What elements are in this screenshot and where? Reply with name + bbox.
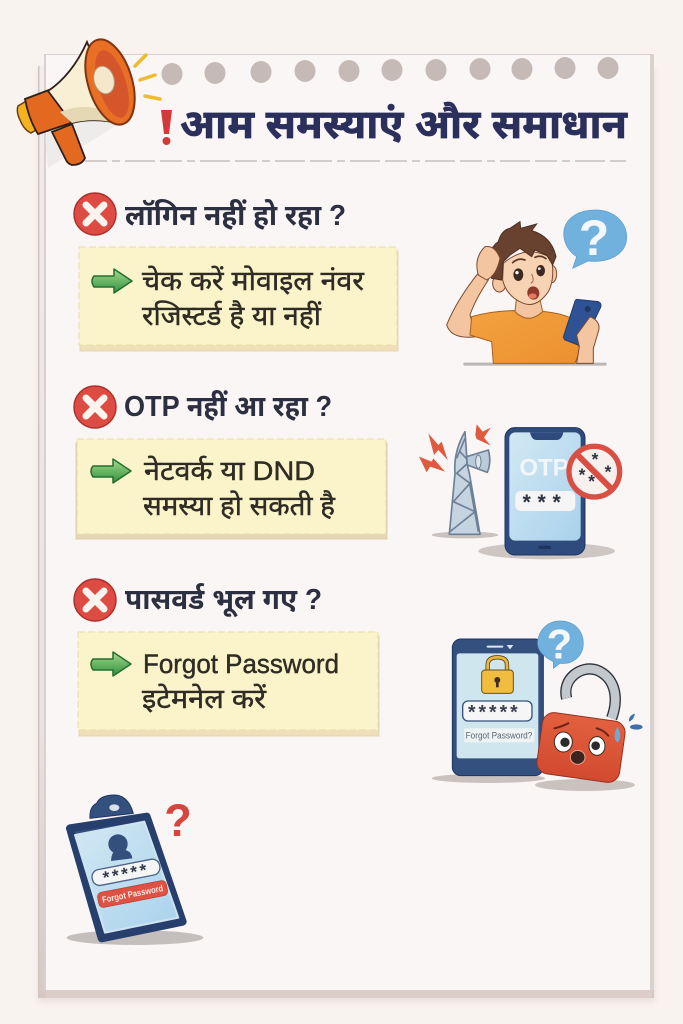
icon: megaphone [17,33,144,168]
red signal bolts [419,424,491,472]
orange shirt [470,311,581,363]
icon: red cross [74,193,116,235]
solution text: रजिस्टर्ड है या नहीं [142,300,322,331]
icon: red exclamation mark [161,110,172,145]
heading: otp: OTP नहीं आ रहा ? [124,390,332,423]
title [161,102,628,147]
phone [505,428,585,555]
phone: *** [523,490,567,514]
illustration: confused boy with phone [447,210,627,366]
phone: ***** [468,703,521,724]
title text: आम समस्याएं और समाधान [180,102,628,147]
solution text: Forgot Password [143,649,339,679]
solution text: चेक करें मोवाइल नंवर [142,265,365,296]
phone: OTP [519,454,569,481]
icon: red cross [74,579,116,621]
phone in hand [564,299,601,345]
raised arm [447,272,488,337]
panel: problem 3 [74,579,379,736]
question bubble: ? [547,620,572,667]
icon: yellow rays [135,55,160,99]
illustration: tower and OTP phone [419,424,620,559]
title divider [85,160,626,162]
question bubble [538,620,583,668]
user avatar [108,834,132,861]
illustration: phone and sad padlock [432,620,643,791]
icon: green arrow [91,459,131,483]
gold lock [482,657,513,693]
panel: problem 1 [74,193,398,351]
speech bubble: ? [579,210,609,266]
signal tower [449,432,490,534]
password field: ***** [101,859,151,888]
illustration: tilted login phone [67,795,203,945]
hand on head [477,246,500,280]
panel: problem 2 [74,386,387,539]
sweat drops [629,714,643,730]
solution card 3 [78,632,379,736]
heading: login: लॉगिन नहीं हो रहा ? [125,199,346,232]
binding holes [162,57,618,85]
solution text: समस्या हो सकती है [143,490,336,521]
no DND sign: * [592,449,599,469]
phone body [70,817,183,938]
sad red padlock [535,669,627,784]
icon: red question mark: ? [164,795,192,846]
icon: red cross [74,386,116,428]
icon: green arrow [91,652,131,676]
icon: green arrow [92,269,132,293]
heading: password: पासवर्ड भूल गए ? [125,583,322,617]
no DND sign: * [579,465,586,485]
clip top [90,795,133,818]
forgot password button: Forgot Password [101,883,164,905]
solution card 2 [76,439,387,539]
no DND sign [569,446,620,497]
phone: Forgot Password? [466,730,532,740]
solution text: नेटवर्क या DND [144,455,315,486]
no DND sign: * [588,471,595,491]
no DND sign: * [605,461,612,481]
solution card 1 [79,247,398,351]
speech bubble [564,210,627,268]
solution text: इटेमनेल करें [142,683,267,714]
phone [452,639,543,776]
